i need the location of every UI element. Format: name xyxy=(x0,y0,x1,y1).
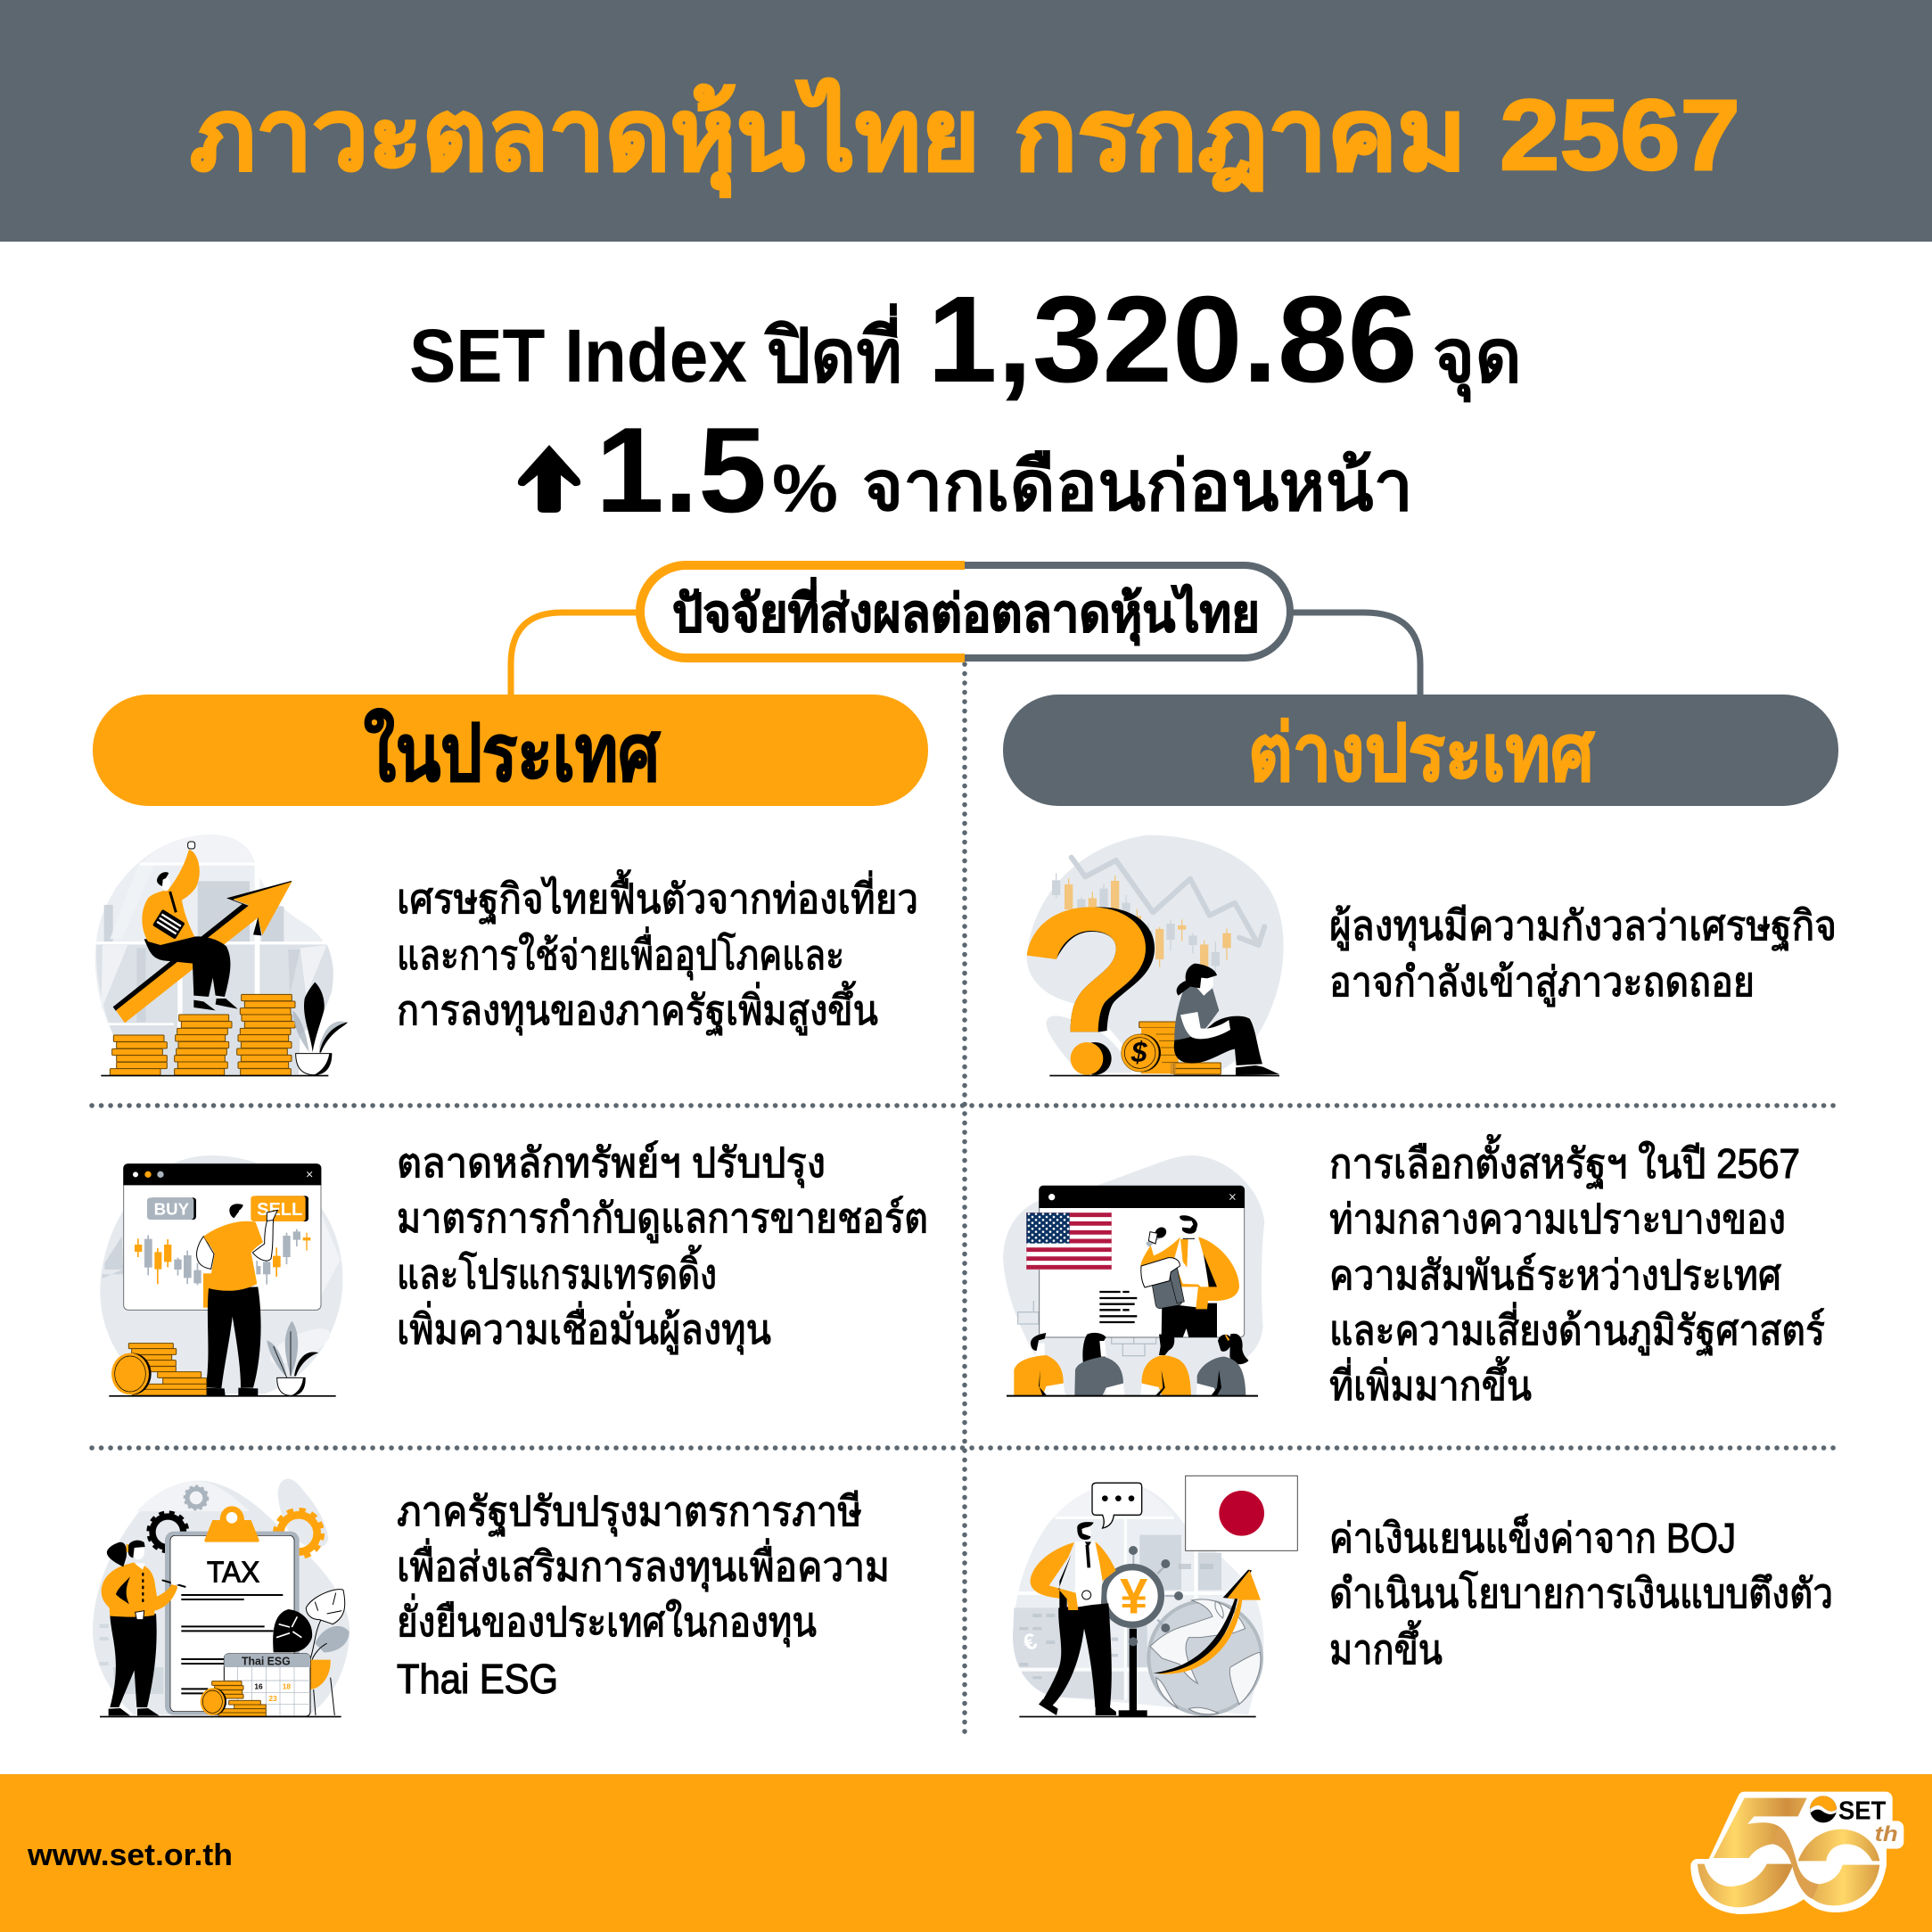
icon: businessman with yen sign and globe: € xyxy=(1020,1629,1040,1657)
coins xyxy=(201,1681,266,1716)
SET Index headline: จุด xyxy=(1433,314,1522,403)
SET mark: th xyxy=(1875,1822,1898,1846)
text: domestic 2: เพิ่มความเชื่อมั่นผู้ลงทุน xyxy=(397,1301,771,1355)
text: domestic 1: และการใช้จ่ายเพื่ออุปโภคและ xyxy=(397,926,844,981)
Thai ESG calendar: 18 xyxy=(283,1681,291,1690)
logo: SET 50th xyxy=(1698,1796,1898,1907)
falling trend line xyxy=(1072,858,1264,945)
plant in pot xyxy=(267,1321,318,1396)
globe xyxy=(1148,1599,1262,1714)
seated woman xyxy=(1174,964,1279,1075)
text: foreign 3: ค่าเงินเยนแข็งค่าจาก BOJ xyxy=(1329,1514,1736,1561)
chart window xyxy=(123,1163,321,1310)
title: กรกฎาคม xyxy=(1014,79,1467,192)
logo white outline xyxy=(1698,1798,1897,1907)
connector: foreign xyxy=(1288,612,1420,695)
Thai ESG calendar xyxy=(224,1654,310,1716)
website: www.set.or.th xyxy=(27,1838,233,1872)
text: domestic 3: Thai ESG xyxy=(397,1656,558,1702)
SET mark xyxy=(1810,1796,1898,1846)
text: domestic 3: ภาครัฐปรับปรุงมาตรการภาษี xyxy=(397,1488,862,1537)
coins xyxy=(111,1344,207,1395)
audience xyxy=(1014,1333,1248,1395)
row divider 1 xyxy=(92,1103,1842,1108)
text: foreign 2: และความเสี่ยงด้านภูมิรัฐศาสตร์ xyxy=(1329,1302,1825,1355)
change from previous month xyxy=(518,402,1413,538)
text: foreign 2: ท่ามกลางความเปราะบางของ xyxy=(1329,1196,1786,1242)
icon: trader at buy sell screen xyxy=(100,1155,342,1397)
text: foreign 2: ความสัมพันธ์ระหว่างประเทศ xyxy=(1329,1252,1781,1298)
title: 2567 xyxy=(1500,79,1740,191)
row divider 2 xyxy=(92,1445,1842,1451)
trader from behind xyxy=(197,1204,277,1395)
text: domestic 3: ยั่งยืนของประเทศในกองทุน xyxy=(397,1593,817,1648)
factors pill heading xyxy=(640,565,1290,658)
text: domestic 1: การลงทุนของภาครัฐเพิ่มสูงขึ้น xyxy=(397,981,878,1036)
footer band xyxy=(0,1774,1932,1932)
text: foreign 3: มากขึ้น xyxy=(1329,1620,1443,1673)
US flag xyxy=(1026,1213,1112,1270)
Thai ESG calendar: 16 xyxy=(254,1681,263,1690)
change from previous month: % xyxy=(772,451,838,527)
speech bubble xyxy=(1092,1483,1142,1528)
woman with pen xyxy=(102,1541,185,1715)
center dotted divider xyxy=(962,664,967,1734)
coins: $ xyxy=(1130,1037,1148,1069)
SET mark: SET xyxy=(1838,1797,1887,1826)
rising arrow xyxy=(113,881,292,1023)
question mark xyxy=(1027,907,1155,1075)
sell button xyxy=(251,1196,308,1221)
plant in pot xyxy=(292,982,348,1075)
text: domestic 2: มาตรการกำกับดูแลการขายชอร์ต xyxy=(397,1195,928,1243)
Japan flag xyxy=(1186,1476,1297,1550)
text: domestic 1: เศรษฐกิจไทยฟื้นตัวจากท่องเที่ยว xyxy=(397,869,918,924)
logo gold numeral xyxy=(1698,1798,1879,1907)
yen dial stand: ¥ xyxy=(1120,1567,1147,1624)
icon: speaker presenting on US election xyxy=(1003,1155,1264,1397)
text: domestic 3: เพื่อส่งเสริมการลงทุนเพื่อความ xyxy=(397,1538,890,1592)
text: foreign 1: ผู้ลงทุนมีความกังวลว่าเศรษฐกิจ xyxy=(1329,902,1837,951)
Thai ESG calendar: 23 xyxy=(268,1694,277,1703)
icon: worried investor with question mark xyxy=(1027,835,1284,1076)
text: foreign 2: การเลือกตั้งสหรัฐฯ ในปี 2567 xyxy=(1329,1134,1800,1188)
speaker xyxy=(1140,1215,1239,1337)
Thai ESG calendar: Thai ESG xyxy=(242,1655,291,1667)
text: foreign 1: อาจกำลังเข้าสู่ภาวะถดถอย xyxy=(1329,958,1755,1007)
connector: domestic xyxy=(511,612,642,695)
buy button: BUY xyxy=(154,1199,190,1218)
change from previous month: 1.5 xyxy=(596,402,767,538)
clipboard: TAX xyxy=(207,1556,259,1589)
panel heading: domestic xyxy=(93,695,928,806)
gears xyxy=(148,1486,323,1558)
panel heading: domestic: ในประเทศ xyxy=(364,708,661,797)
icon: up arrow xyxy=(518,445,580,513)
coins xyxy=(1122,1022,1221,1074)
factors pill heading: ปัจจัยที่ส่งผลต่อตลาดหุ้นไทย xyxy=(672,577,1260,646)
businessman xyxy=(142,842,238,1010)
clipboard xyxy=(165,1506,300,1715)
SET Index headline: 1,320.86 xyxy=(927,271,1418,408)
rising curved arrow xyxy=(1153,1570,1261,1674)
candlesticks xyxy=(1052,873,1220,971)
SET Index headline xyxy=(409,271,1522,408)
icon: businessman with yen sign and globe xyxy=(1013,1476,1297,1717)
icon: businessman on rising arrow xyxy=(95,834,348,1076)
buy button xyxy=(147,1197,196,1220)
coin stacks xyxy=(110,994,295,1075)
text: domestic 2: และโปรแกรมเทรดดิ้ง xyxy=(397,1245,717,1297)
title: ภาวะตลาดหุ้นไทย xyxy=(190,78,980,198)
yen dial stand xyxy=(1090,1546,1183,1716)
text: domestic 2: ตลาดหลักทรัพย์ฯ ปรับปรุง xyxy=(397,1139,826,1188)
change from previous month: จากเดือนก่อนหน้า xyxy=(862,447,1413,525)
text: foreign 3: ดำเนินนโยบายการเงินแบบตึงตัว xyxy=(1329,1570,1833,1616)
plant xyxy=(273,1590,349,1715)
text: foreign 2: ที่เพิ่มมากขึ้น xyxy=(1329,1356,1532,1409)
candlesticks xyxy=(135,1229,310,1308)
header band xyxy=(0,0,1932,242)
sell button: SELL xyxy=(257,1200,302,1220)
panel heading: foreign xyxy=(1003,695,1838,806)
icon: woman with tax clipboard xyxy=(93,1479,349,1717)
presentation window xyxy=(1039,1186,1245,1337)
SET Index headline: SET Index ปิดที่ xyxy=(409,303,902,398)
businessman xyxy=(1031,1522,1116,1715)
panel heading: foreign: ต่างประเทศ xyxy=(1248,709,1595,797)
